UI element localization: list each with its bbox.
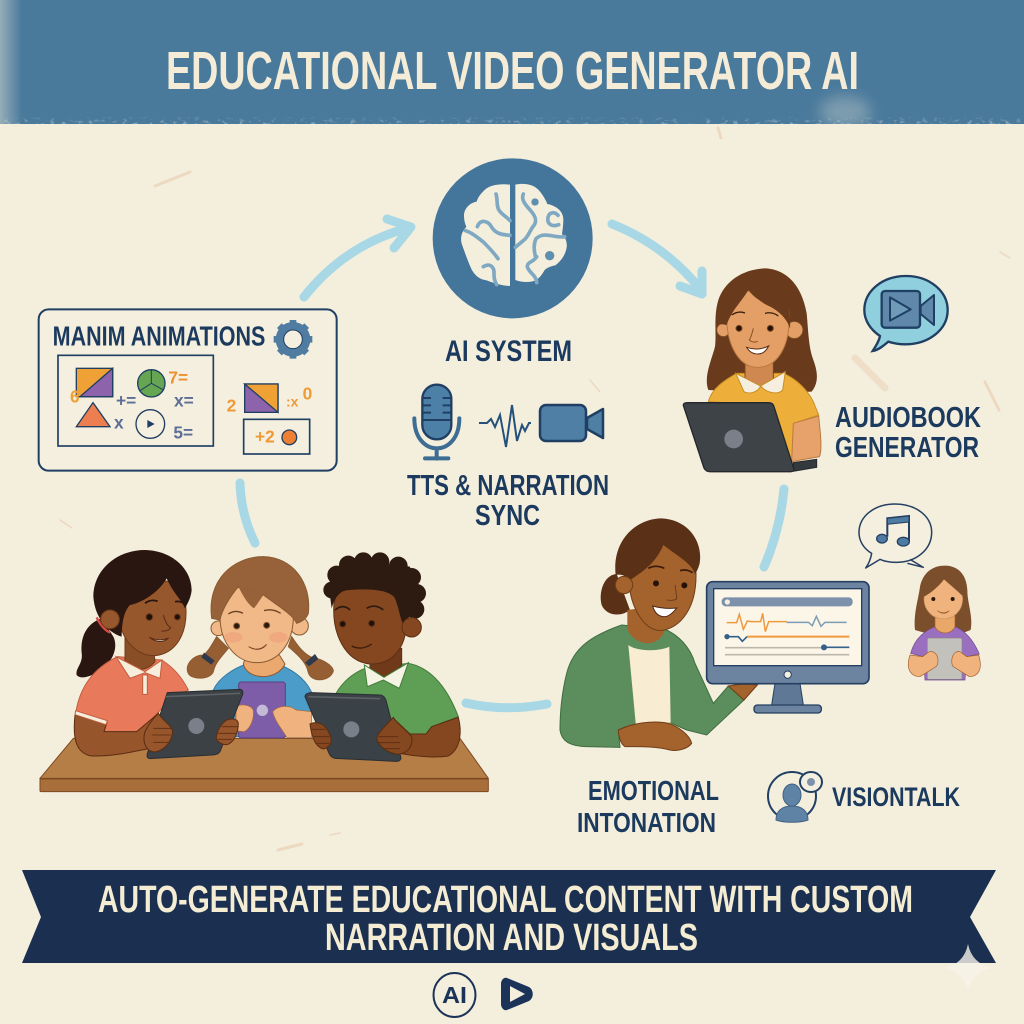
icon: play badge xyxy=(501,978,533,1010)
label: audiobook generator xyxy=(835,402,981,464)
icon: video camera xyxy=(540,405,603,441)
ribbon text: NARRATION AND VISUALS xyxy=(325,917,698,959)
arm and tablet right xyxy=(305,693,460,761)
laptop xyxy=(683,403,817,472)
label: emotional intonation: EMOTIONAL xyxy=(588,775,719,806)
formula board: 7= xyxy=(168,367,188,387)
label: VisionTalk: VISIONTALK xyxy=(832,782,960,812)
small formula cards: 2 xyxy=(227,396,236,416)
table xyxy=(40,738,488,792)
icon: AI badge xyxy=(434,973,476,1017)
small formula cards: 0 xyxy=(303,383,312,403)
icon: video speech bubble xyxy=(864,276,948,351)
formula board: x xyxy=(114,412,124,432)
icon: waveform xyxy=(479,405,531,447)
formula board: x= xyxy=(174,391,194,411)
formula board: += xyxy=(116,391,136,411)
icon: sparkle xyxy=(944,944,993,992)
bottom ribbon xyxy=(22,870,996,963)
panel heading: MANIM ANIMATIONS xyxy=(53,320,265,351)
illustration: students with tablets xyxy=(40,550,488,792)
icon: AI brain xyxy=(433,158,593,318)
label: TTS and narration sync xyxy=(407,470,609,532)
label: AI system: AI SYSTEM xyxy=(445,335,572,368)
label: emotional intonation xyxy=(577,775,719,838)
panel: Manim animations xyxy=(39,309,337,471)
label: TTS and narration sync: SYNC xyxy=(475,500,540,532)
small formula cards: :x xyxy=(286,394,299,410)
monitor xyxy=(707,582,869,713)
student 1 xyxy=(76,550,192,733)
label: TTS and narration sync: TTS & NARRATION xyxy=(407,470,609,502)
small formula cards xyxy=(227,383,312,454)
illustration: teacher and monitor xyxy=(560,504,980,750)
icon: AI badge: AI xyxy=(442,982,467,1008)
illustration: girl at laptop xyxy=(683,268,821,472)
ribbon text xyxy=(98,879,913,959)
icon: VisionTalk xyxy=(768,772,822,822)
formula board xyxy=(58,355,213,446)
teacher xyxy=(560,518,757,750)
icon: music bubble xyxy=(859,504,932,568)
cycle arrows xyxy=(240,219,784,708)
student 2 xyxy=(187,557,333,737)
icon: microphone xyxy=(414,385,459,459)
small girl with tablet xyxy=(908,566,980,680)
label: audiobook generator: GENERATOR xyxy=(835,432,979,464)
formula board: 5= xyxy=(173,422,193,442)
label: audiobook generator: AUDIOBOOK xyxy=(835,402,981,434)
center tablet xyxy=(236,682,312,738)
small formula cards: +2 xyxy=(255,427,275,447)
student 3 xyxy=(323,552,458,734)
formula board: 6 xyxy=(70,387,80,407)
arm and tablet left xyxy=(74,689,243,759)
icon: gear xyxy=(274,320,312,359)
label: emotional intonation: INTONATION xyxy=(577,807,716,838)
title banner xyxy=(0,0,1024,128)
